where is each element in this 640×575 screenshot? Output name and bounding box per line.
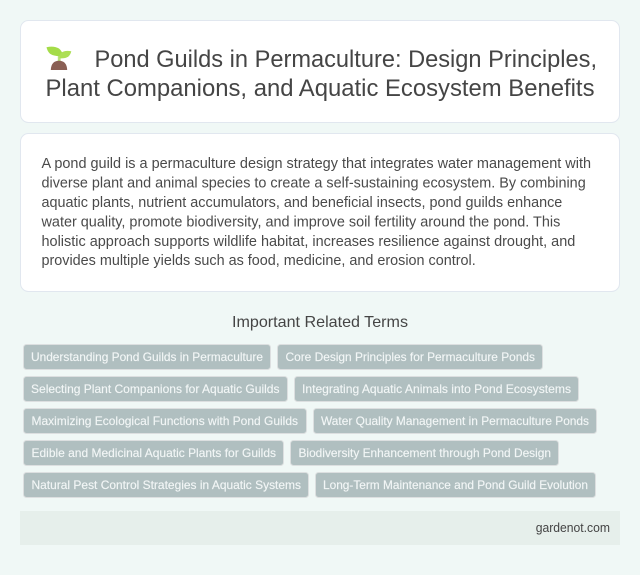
title text: Plant Companions, and Aquatic Ecosystem Benefits [46,75,594,102]
tag: water quality management [314,408,596,434]
tag: long-term maintenance [316,472,596,498]
tag: understanding pond guilds: Understanding Pond Guilds in Permaculture [31,350,263,364]
tag: integrating aquatic animals [294,376,578,402]
description text: diverse plant and animal species to create a self-sustaining ecosystem. By combining [42,176,586,192]
tag: long-term maintenance: Long-Term Maintenance and Pond Guild Evolution [323,478,588,492]
related term tags [24,344,596,498]
tag: edible and medicinal plants: Edible and Medicinal Aquatic Plants for Guilds [32,446,276,460]
tag: selecting plant companions: Selecting Plant Companions for Aquatic Guilds [31,382,280,396]
tag: integrating aquatic animals: Integrating Aquatic Animals into Pond Ecosystems [302,382,571,396]
tag: biodiversity enhancement: Biodiversity Enhancement through Pond Design [298,446,551,460]
icon: seedling [46,47,71,70]
tag: biodiversity enhancement [290,440,558,466]
panel: title card [20,20,620,122]
tag: natural pest control [24,472,308,498]
description text: holistic approach supports wildlife habitat, increases resilience against drought, and [42,234,575,250]
tag: core design principles: Core Design Principles for Permaculture Ponds [286,350,535,364]
description text [40,156,591,269]
heading: important related terms: Important Related Terms [232,314,408,331]
tag: water quality management: Water Quality Management in Permaculture Ponds [321,414,589,428]
panel: description [20,134,620,292]
tag: core design principles [278,344,542,370]
title text [46,46,597,102]
tag: understanding pond guilds [24,344,270,370]
tag: selecting plant companions [24,376,288,402]
tag: maximizing ecological functions: Maximizing Ecological Functions with Pond Guilds [32,414,298,428]
description text: water quality, promote biodiversity, and improve soil fertility around the pond. This [40,214,560,230]
tag: natural pest control: Natural Pest Control Strategies in Aquatic Systems [32,478,301,492]
description text: provides multiple yields such as food, medicine, and erosion control. [42,253,476,269]
description text: aquatic plants, nutrient accumulators, and beneficial insects, pond guilds enhance [42,195,562,211]
tag: maximizing ecological functions [24,408,306,434]
footer bar [20,511,620,545]
title text: Pond Guilds in Permaculture: Design Principles, [94,46,597,73]
tag: edible and medicinal plants [24,440,284,466]
description text: A pond guild is a permaculture design strategy that integrates water management with [42,156,591,172]
footer source text: gardenot.com [536,520,610,535]
